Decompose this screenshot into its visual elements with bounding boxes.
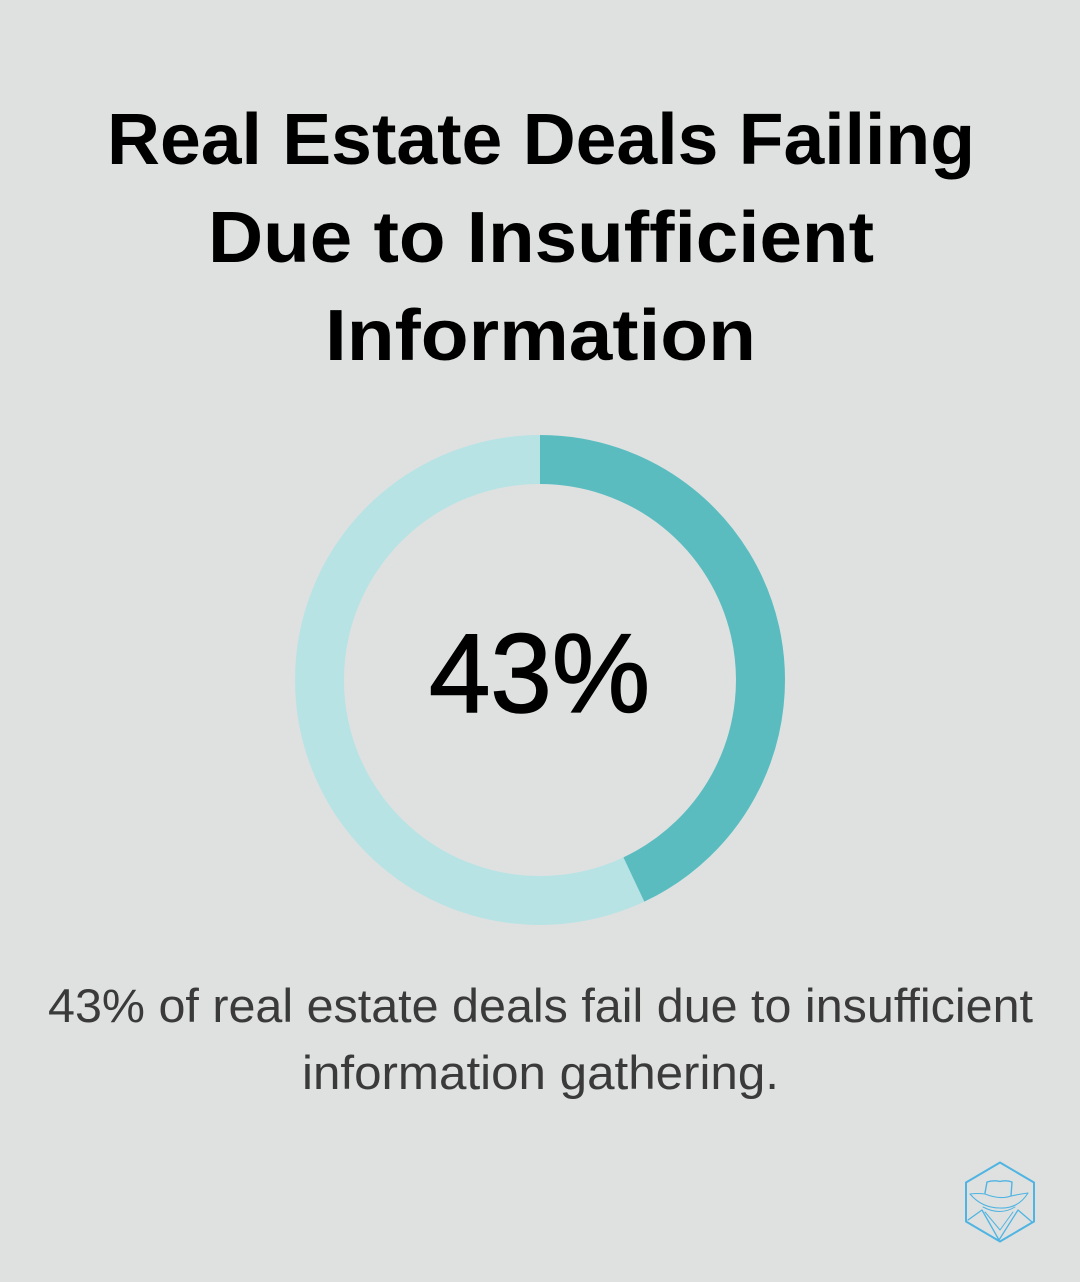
title: Information (325, 296, 756, 376)
title (107, 100, 975, 376)
description text (48, 979, 1033, 1099)
title: Due to Insufficient (208, 198, 874, 278)
center value: 43% (429, 611, 650, 736)
title: Real Estate Deals Failing (107, 100, 975, 180)
description text: information gathering. (302, 1046, 779, 1099)
description text: 43% of real estate deals fail due to insufficient (48, 979, 1033, 1032)
donut chart: 43% (320, 460, 760, 900)
icon: logo with hat in hexagon (966, 1162, 1034, 1242)
